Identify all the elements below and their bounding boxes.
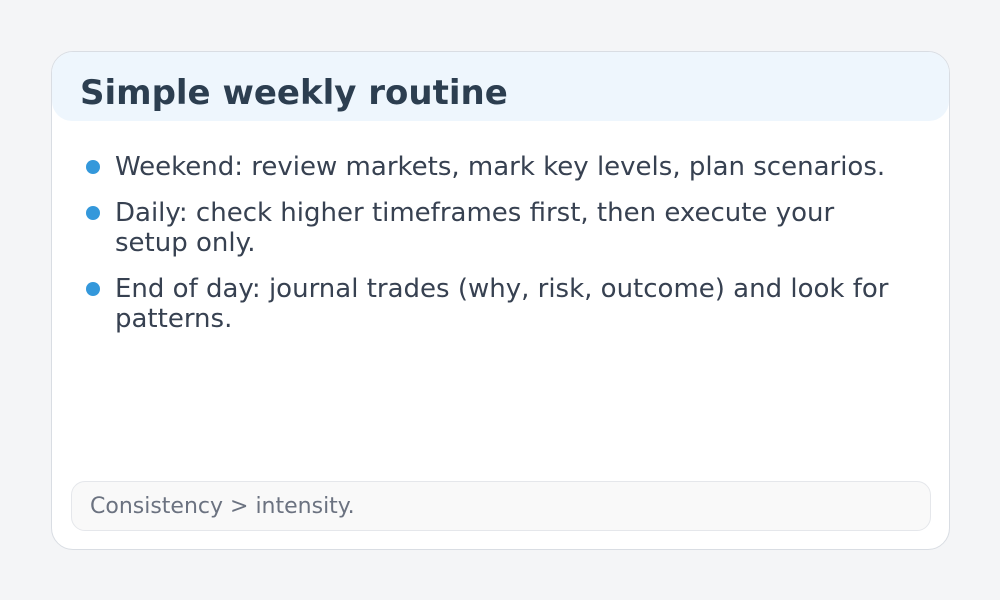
bullet: end of day: End of day: journal trades (why, risk, outcome) and look for patterns.: [115, 274, 888, 334]
bullet: daily: Daily: check higher timeframes first, then execute your setup only.: [115, 198, 834, 258]
header band: [52, 52, 949, 121]
panel: card: [51, 51, 950, 550]
footer callout: [71, 481, 931, 531]
title: Simple weekly routine: [80, 73, 508, 113]
bullet: weekend: Weekend: review markets, mark key levels, plan scenarios.: [115, 152, 885, 182]
footer callout: Consistency > intensity.: [90, 494, 355, 519]
